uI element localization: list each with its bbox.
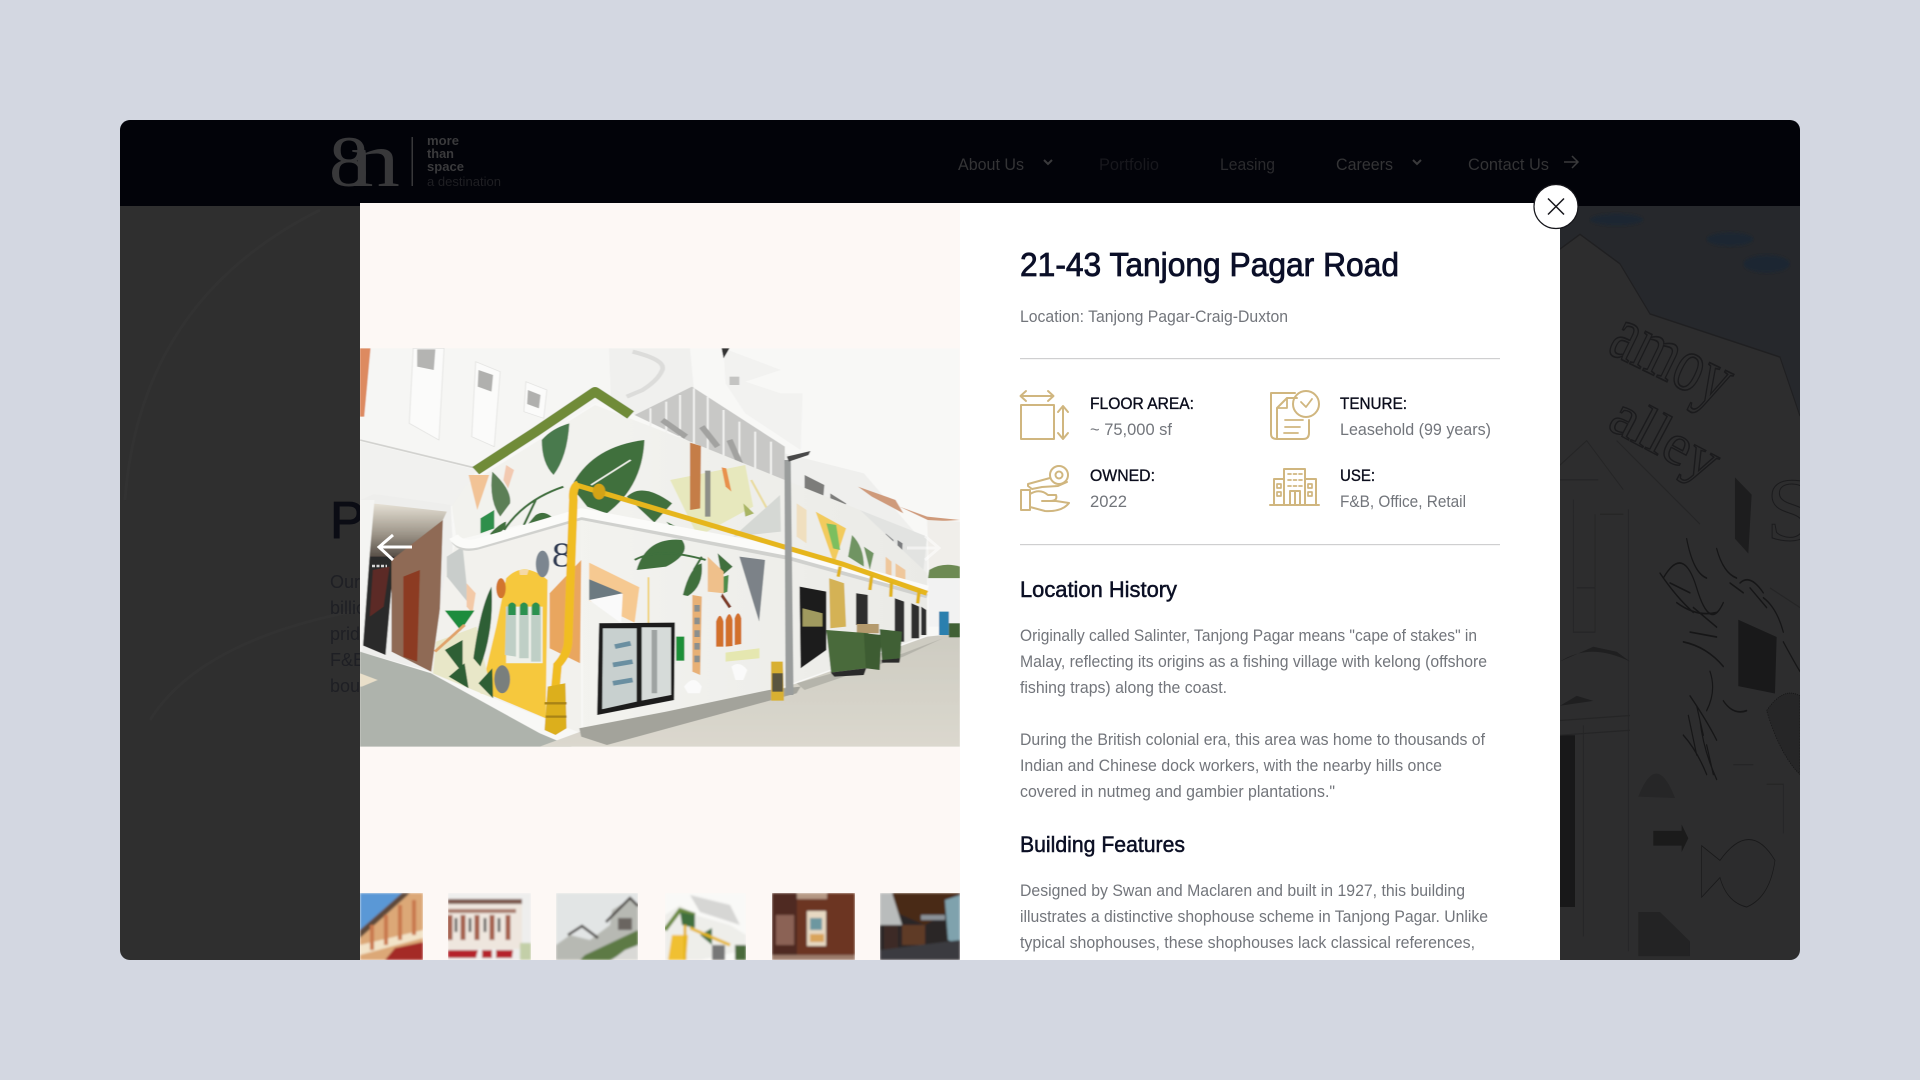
stat: tenure <box>1271 391 1491 439</box>
steps <box>1638 912 1690 956</box>
railing <box>635 387 785 482</box>
logo: than <box>427 146 454 161</box>
thumbnail strip <box>360 893 960 960</box>
top navigation bar <box>120 116 1800 206</box>
thumbnail 5 <box>772 893 855 960</box>
stat: use: USE: <box>1340 467 1375 485</box>
greenery on parapet <box>476 392 631 471</box>
nav: Contact Us <box>1468 156 1579 170</box>
browser window frame <box>120 116 1816 960</box>
nav: Leasing: Leasing <box>1220 155 1275 174</box>
icon: key in hand <box>1021 466 1069 511</box>
property title: 21-43 Tanjong Pagar Road <box>1020 246 1399 283</box>
paragraph: colonial era <box>1020 730 1485 801</box>
dimmed page heading: Portfolio <box>330 492 521 550</box>
yellow gas pipe <box>576 485 927 593</box>
paragraph: building features: illustrates a distinctive shophouse scheme in Tanjong Pagar. Unlike <box>1020 907 1488 926</box>
stat: owned: 2022 <box>1090 492 1127 511</box>
paragraph: building features <box>1020 881 1488 952</box>
dimmed page paragraph: billion <box>330 598 376 618</box>
dark sky <box>1560 206 1800 416</box>
modal: details panel <box>960 203 1560 960</box>
paragraph: colonial era: During the British colonial era, this area was home to thousands of <box>1020 730 1485 749</box>
windows and shutters <box>1735 477 1752 554</box>
mural leaves <box>490 423 733 596</box>
thumbnail 1 <box>360 893 423 960</box>
modal: image gallery panel <box>360 203 960 960</box>
right dimmed background photo <box>1560 206 1816 960</box>
stat: floor area: FLOOR AREA: <box>1090 395 1194 413</box>
dimmed page paragraph: F&B <box>330 650 365 670</box>
nav: Careers <box>1336 158 1422 170</box>
stat: floor area <box>1020 391 1194 439</box>
utility cabinet <box>597 623 675 715</box>
mural lettering: alley: alley <box>1600 382 1732 494</box>
paragraph: colonial era: Indian and Chinese dock workers, with the nearby hills once <box>1020 756 1442 775</box>
stat: floor area: ~ 75,000 sf <box>1090 420 1172 439</box>
previous arrow <box>372 535 412 566</box>
stat: tenure: Leasehold (99 years) <box>1340 420 1491 439</box>
paragraph: origins: Originally called Salinter, Tanjong Pagar means "cape of stakes" in <box>1020 626 1477 645</box>
main photo: mural building <box>360 348 960 747</box>
nav: Portfolio: Portfolio <box>1099 155 1159 174</box>
logo: n <box>350 116 400 203</box>
left dimmed background panel <box>120 206 360 960</box>
thumbnail 2 <box>448 893 531 960</box>
mural wall faces <box>452 405 595 540</box>
arrow sign <box>1653 825 1688 852</box>
heading: Building Features: Building Features <box>1020 832 1185 857</box>
upper buildings <box>360 348 635 480</box>
paragraph: origins: fishing traps) along the coast. <box>1020 678 1227 697</box>
mural lettering: second word: S <box>1766 461 1816 560</box>
architectural lines <box>1560 441 1798 735</box>
nav: Careers: Careers <box>1336 155 1393 174</box>
nav: Contact Us: Contact Us <box>1468 155 1549 174</box>
white ledge <box>454 518 927 596</box>
paragraph: colonial era: covered in nutmeg and gambier plantations." <box>1020 782 1335 801</box>
yellow arched mural <box>480 570 548 718</box>
icon: floor area <box>1020 391 1068 439</box>
dimmed page paragraph: pride <box>330 624 370 644</box>
spiral stairs and tower <box>609 348 694 415</box>
location line: Location: Tanjong Pagar-Craig-Duxton <box>1020 307 1288 326</box>
thumbnail 4 <box>665 893 746 960</box>
nav: About Us <box>958 158 1052 170</box>
stat: use: F&B, Office, Retail <box>1340 492 1466 511</box>
main photo: mural building: 8 <box>552 537 572 575</box>
mural lettering: amoy: amoy <box>1599 290 1749 422</box>
paragraph: origins: Malay, reflecting its origins as a fishing village with kelong (offshore <box>1020 652 1487 671</box>
stat: tenure: TENURE: <box>1340 395 1407 413</box>
dimmed page paragraph: boutique <box>330 676 399 696</box>
stat: owned <box>1021 466 1155 511</box>
logo <box>332 137 500 186</box>
fish mural <box>1702 840 1775 907</box>
passage entrance <box>360 494 453 677</box>
paragraph: origins <box>1020 626 1487 697</box>
road <box>540 633 960 747</box>
mural geometry <box>469 475 489 510</box>
icon: office building <box>1270 469 1319 505</box>
thumbnail 6 <box>880 893 960 960</box>
paragraph: building features: typical shophouses, these shophouses lack classical references, <box>1020 933 1475 952</box>
nav: About Us: About Us <box>958 155 1024 174</box>
window-frame mural <box>589 563 639 623</box>
thumbnail 3 <box>556 893 638 960</box>
stat: owned: OWNED: <box>1090 467 1155 485</box>
dragon mural <box>1660 539 1800 779</box>
dimmed page paragraph: Our portfolio <box>330 572 429 592</box>
far doors and bins <box>799 587 826 668</box>
logo: 8 <box>329 122 369 202</box>
paragraph: building features: Designed by Swan and Maclaren and built in 1927, this building <box>1020 881 1465 900</box>
logo: more <box>427 133 459 148</box>
lamp post <box>784 460 794 695</box>
heading: Location History: Location History <box>1020 577 1177 602</box>
close button <box>1534 184 1578 228</box>
dimmed page paragraph <box>331 575 360 692</box>
logo: a destination <box>427 174 501 189</box>
icon: tenure document with clock <box>1271 391 1319 439</box>
logo: space <box>427 159 464 174</box>
stat: use <box>1270 467 1466 511</box>
next arrow <box>907 536 939 560</box>
